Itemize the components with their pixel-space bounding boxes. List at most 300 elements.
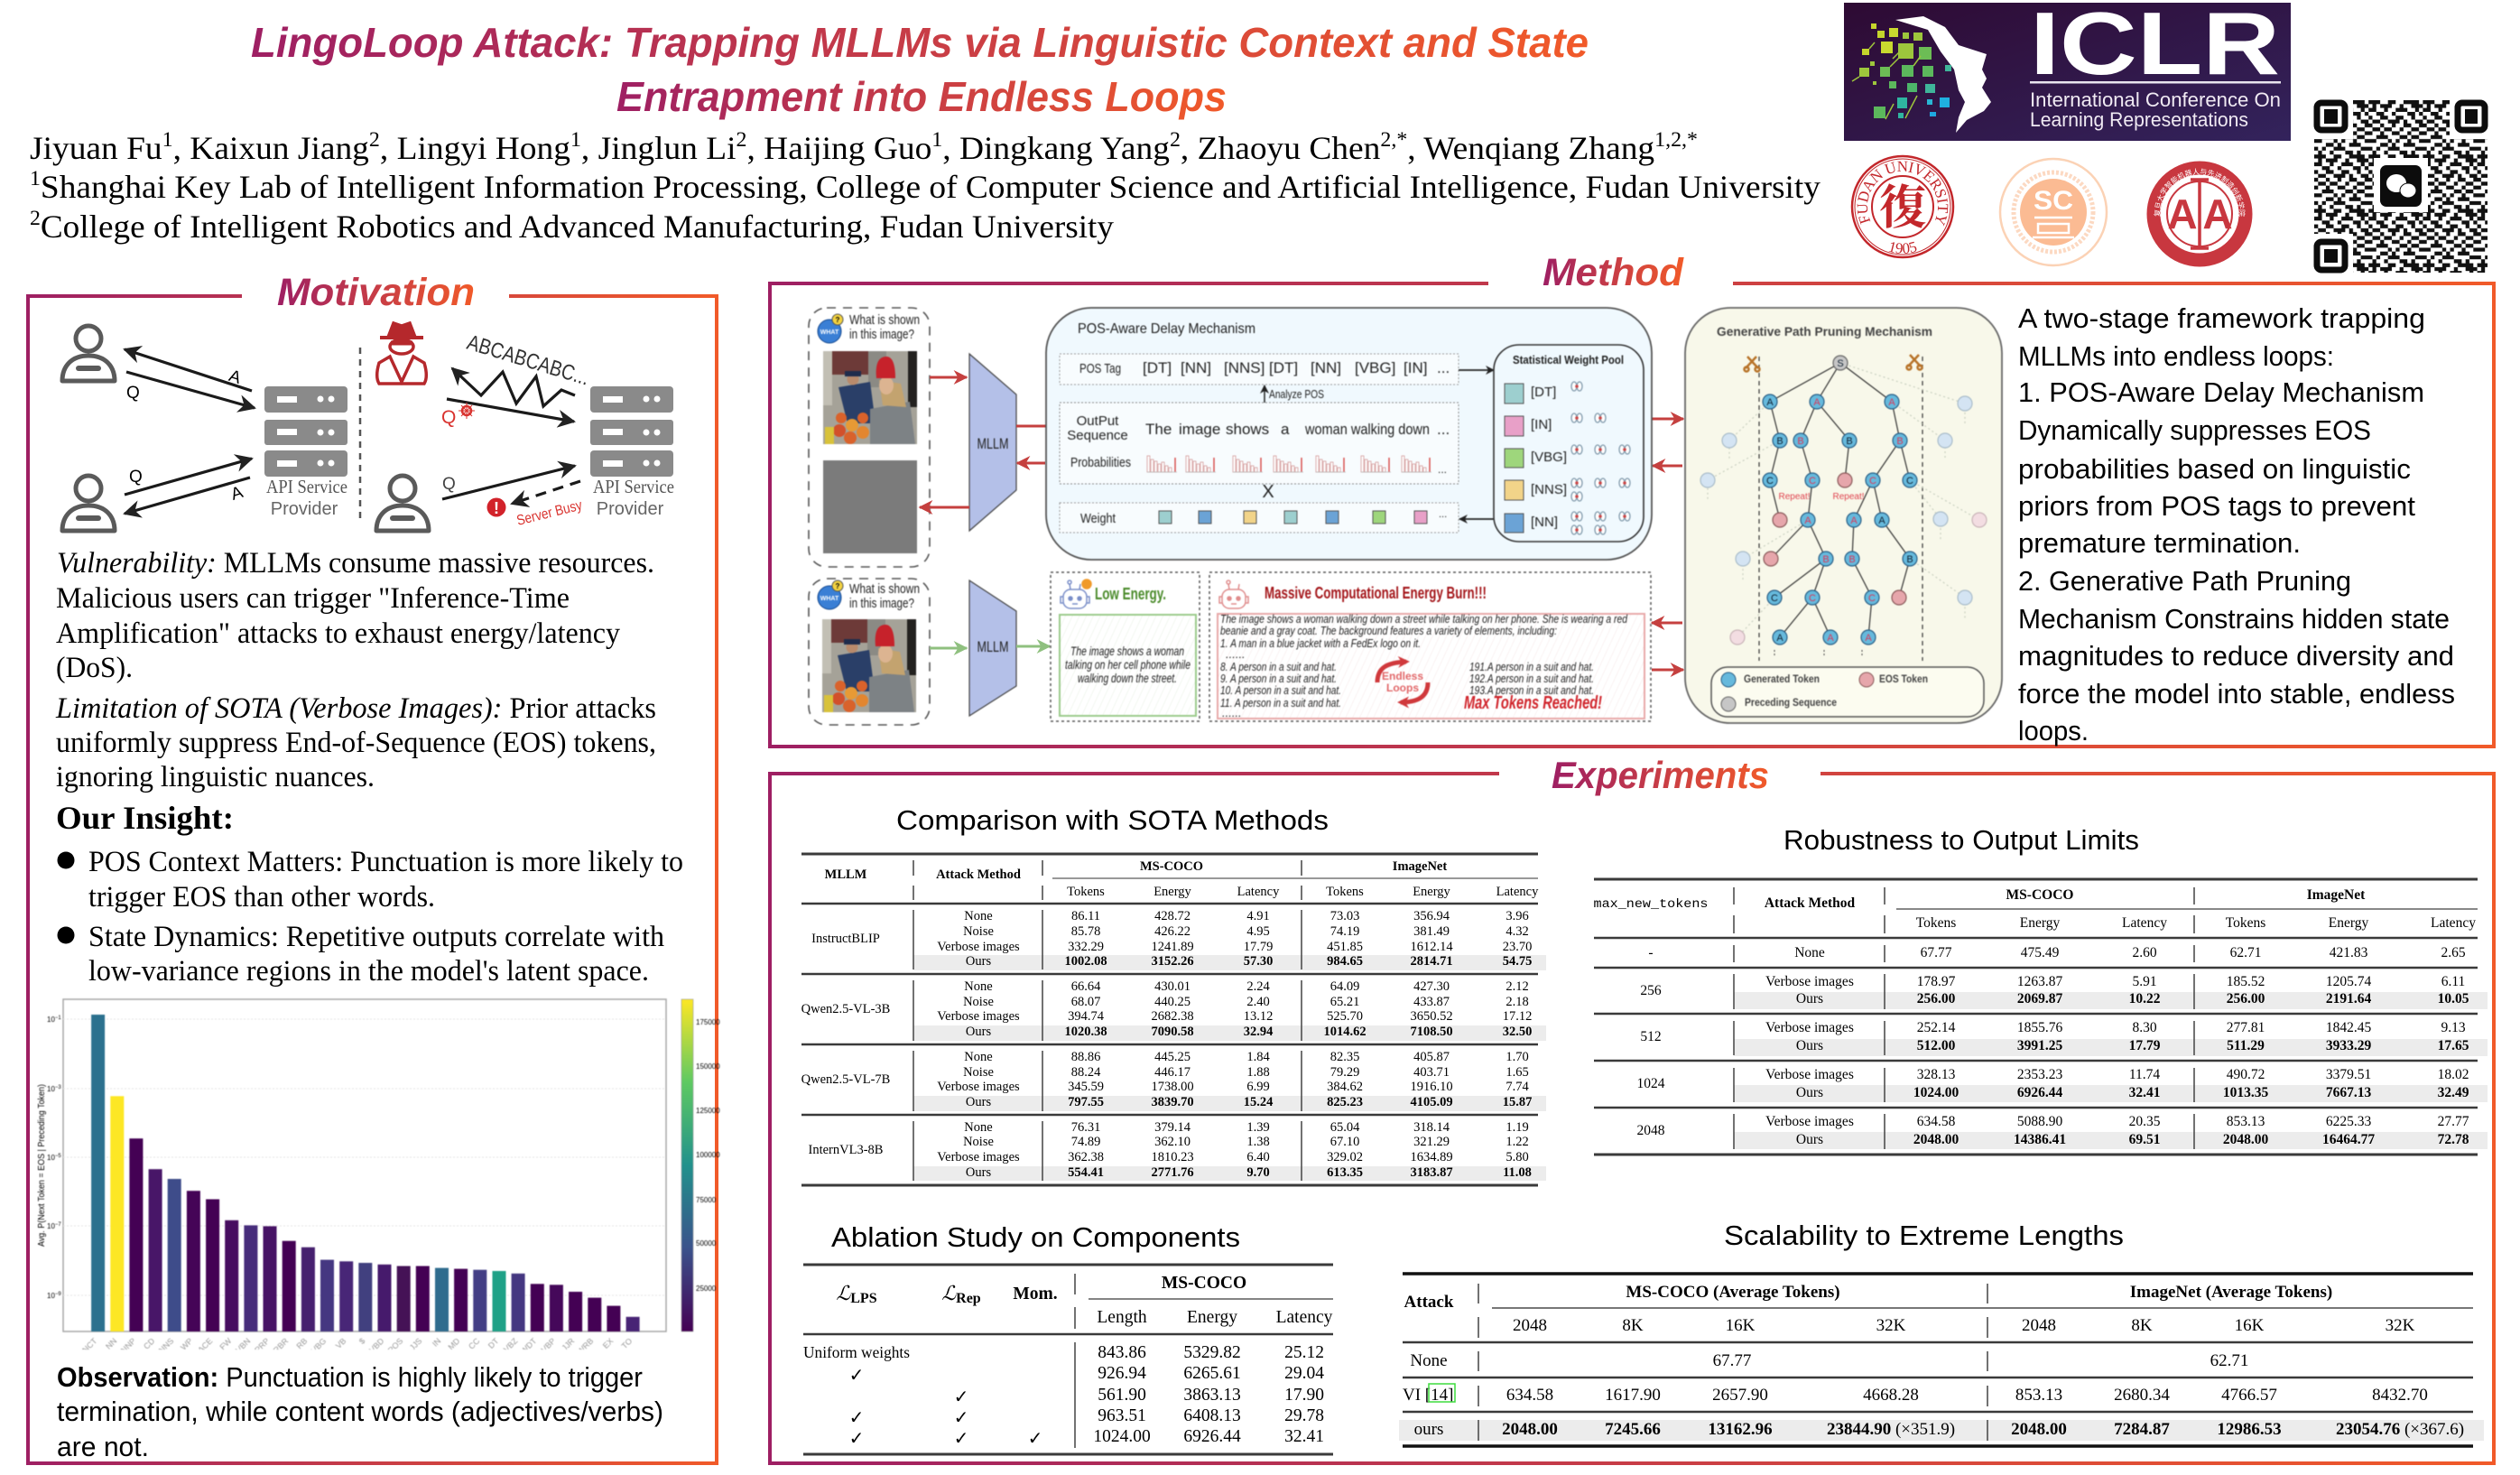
heading: Scalability to Extreme Lengths: Scalability to Extreme Lengths xyxy=(1724,1220,2124,1251)
table: robustness to output limits: Verbose images xyxy=(1765,974,1854,989)
table: ablation study: 926.94 xyxy=(1098,1364,1146,1383)
table: robustness to output limits: 20.35 xyxy=(2129,1114,2161,1129)
table: robustness to output limits: 2069.87 xyxy=(2017,991,2062,1007)
table: comparison with SOTA methods: 426.22 xyxy=(1154,924,1191,939)
colorbar: 50000 xyxy=(696,1239,717,1248)
table: comparison with SOTA methods: 76.31 xyxy=(1071,1120,1100,1135)
labels: repeat: Repeat! xyxy=(1832,492,1865,502)
table: robustness to output limits: 490.72 xyxy=(2227,1067,2265,1082)
table: comparison with SOTA methods: 15.87 xyxy=(1503,1095,1532,1109)
authors: 2 xyxy=(737,128,746,151)
check marks: ✓ xyxy=(849,1406,864,1428)
table: robustness to output limits: 3379.51 xyxy=(2326,1067,2371,1082)
logo: AIA college: A xyxy=(2167,190,2198,237)
table: comparison with SOTA methods: 433.87 xyxy=(1413,995,1450,1009)
node letters: C xyxy=(1868,593,1876,604)
heading: Method: Method xyxy=(1543,251,1684,294)
POS tag row: [IN] xyxy=(1404,359,1427,376)
table: robustness to output limits: Latency xyxy=(2122,915,2167,931)
x axis labels: PRP xyxy=(253,1336,271,1355)
table: comparison with SOTA methods: 4.91 xyxy=(1246,909,1270,923)
table: comparison with SOTA methods: Tokens xyxy=(1326,885,1364,899)
output sequence and probabilities: Sequence xyxy=(1067,428,1128,443)
table: comparison with SOTA methods: 13.12 xyxy=(1244,1009,1273,1024)
node letters: A xyxy=(1878,515,1885,526)
table: comparison with SOTA methods: MS-COCO xyxy=(1140,859,1203,874)
table: robustness to output limits: Ours xyxy=(1796,1132,1823,1147)
weight row: ... xyxy=(1439,509,1447,520)
token nodes xyxy=(1700,356,1987,645)
table: comparison with SOTA methods: 66.64 xyxy=(1071,979,1101,994)
table: robustness to output limits: 16464.77 xyxy=(2322,1132,2375,1147)
table: ablation study: 17.90 xyxy=(1284,1386,1324,1405)
output sequence and probabilities: OutPut xyxy=(1077,413,1119,429)
panel: Method frame xyxy=(770,283,2494,747)
table: scalability to extreme lengths: 8K xyxy=(2131,1316,2153,1335)
labels: API Service Provider: API Service xyxy=(593,476,674,497)
POS tag row xyxy=(1060,354,1459,385)
statistical weight pool: [VBG] xyxy=(1531,450,1567,465)
table: robustness to output limits: 185.52 xyxy=(2227,974,2265,989)
text: method description: Dynamically suppresses EOS xyxy=(2018,414,2371,446)
title xyxy=(251,19,1589,120)
table: comparison with SOTA methods: 68.07 xyxy=(1071,995,1100,1009)
statistical weight pool: [NNS] xyxy=(1531,482,1567,497)
table: ablation study: 32.41 xyxy=(1284,1427,1324,1446)
table: robustness to output limits: Tokens xyxy=(1916,915,1956,931)
table: comparison with SOTA methods: 797.55 xyxy=(1068,1095,1104,1109)
node letters: C xyxy=(1771,593,1778,604)
table: comparison with SOTA methods: 405.87 xyxy=(1413,1050,1450,1064)
table: comparison with SOTA methods: 82.35 xyxy=(1330,1050,1359,1064)
table: ablation study: 843.86 xyxy=(1098,1343,1146,1362)
panel: Generative Path Pruning Mechanism: Generative Path Pruning Mechanism xyxy=(1717,324,1932,339)
text: method description: loops. xyxy=(2018,715,2089,747)
output sequence and probabilities: ... xyxy=(1438,463,1447,476)
table: scalability to extreme lengths: 16K xyxy=(2235,1316,2265,1335)
labels: Q and A xyxy=(126,366,246,505)
node letters: C xyxy=(1766,476,1774,487)
table: scalability to extreme lengths: 2680.34 xyxy=(2114,1386,2170,1405)
table: robustness to output limits: 32.49 xyxy=(2438,1085,2469,1100)
table: robustness to output limits: Ours xyxy=(1796,1038,1823,1053)
table: robustness to output limits: 67.77 xyxy=(1921,945,1952,960)
table: robustness to output limits: 475.49 xyxy=(2021,945,2060,960)
colorbar: 125000 xyxy=(696,1107,720,1115)
table: scalability to extreme lengths: None xyxy=(1410,1351,1448,1370)
table: robustness to output limits: 2048.00 xyxy=(2223,1132,2268,1147)
output sequence and probabilities: The xyxy=(1145,421,1172,438)
table: robustness to output limits: 6225.33 xyxy=(2326,1114,2371,1129)
output sequence and probabilities: image xyxy=(1179,421,1220,438)
arrow: server busy xyxy=(512,481,580,504)
colorbar: 175000 xyxy=(696,1018,720,1026)
x axis labels: VBP xyxy=(540,1336,557,1354)
table: robustness to output limits: 2191.64 xyxy=(2326,991,2371,1007)
table: scalability to extreme lengths: 8K xyxy=(1622,1316,1644,1335)
table: robustness to output limits: 5088.90 xyxy=(2017,1114,2062,1129)
table: robustness to output limits: 2.65 xyxy=(2441,945,2466,960)
weight row xyxy=(1060,503,1459,533)
table: robustness to output limits: 1024 xyxy=(1637,1076,1665,1091)
table: comparison with SOTA methods: 525.70 xyxy=(1327,1009,1363,1024)
text: method description: MLLMs into endless loops: xyxy=(2018,340,2334,372)
check marks: ✓ xyxy=(954,1386,968,1407)
table: comparison with SOTA methods: Latency xyxy=(1237,885,1280,899)
table: comparison with SOTA methods: Attack Method xyxy=(936,867,1021,882)
table: comparison with SOTA methods: 2.40 xyxy=(1246,995,1270,1009)
table: scalability to extreme lengths: 7284.87 xyxy=(2114,1420,2170,1439)
logo: AIA college: 复旦大学智能机器人与先进制造创新学院 xyxy=(2154,168,2246,217)
table: ablation study: Mom. xyxy=(1013,1285,1058,1303)
diagram: clean input (bottom): in this image? xyxy=(849,596,914,611)
table: comparison with SOTA methods: Ours xyxy=(966,1165,991,1180)
label: ABCABCABC: ABCABCABC... xyxy=(464,330,592,391)
y axis: −9 xyxy=(55,1292,61,1297)
logo: Fudan University: FUDAN UNIVERSITY xyxy=(1858,161,1948,226)
table: comparison with SOTA methods: 356.94 xyxy=(1413,909,1450,923)
table: ablation study: LPS xyxy=(850,1291,877,1306)
panel: Low Energy: talking on her cell phone while xyxy=(1065,657,1191,672)
authors: , Wenqiang Zhang xyxy=(1407,130,1654,166)
panel: Low Energy: walking down the street. xyxy=(1078,671,1177,685)
text: method description: A two-stage framework trapping xyxy=(2018,302,2425,334)
table: robustness to output limits: 5.91 xyxy=(2132,974,2157,989)
x axis labels: CD xyxy=(142,1336,157,1351)
text: observation: Observation: Punctuation is highly likely to trigger xyxy=(57,1361,643,1393)
model: MLLM (top) xyxy=(969,354,1016,531)
table: scalability to extreme lengths: 62.71 xyxy=(2210,1351,2248,1370)
model: MLLM (top): MLLM xyxy=(977,435,1009,452)
table: robustness to output limits: 252.14 xyxy=(1917,1020,1956,1035)
logo: Fudan University xyxy=(1850,155,1955,258)
table: comparison with SOTA methods: 2682.38 xyxy=(1151,1009,1194,1024)
x axis labels: DT xyxy=(486,1336,501,1350)
table: robustness to output limits: None xyxy=(1794,945,1825,960)
model: MLLM (bottom): MLLM xyxy=(977,638,1009,655)
logo: AIA college: A xyxy=(2202,190,2233,237)
labels: Q and A: Q xyxy=(126,384,140,403)
table: comparison with SOTA methods: Ours xyxy=(966,954,991,969)
label: malicious Q with virus xyxy=(441,403,475,428)
table: robustness to output limits: ImageNet xyxy=(2307,887,2366,903)
table: comparison with SOTA methods: 825.23 xyxy=(1327,1095,1363,1109)
x axis labels: WDT xyxy=(519,1336,539,1356)
bar chart: EOS probability by POS tag xyxy=(36,999,720,1362)
y axis: 10 xyxy=(47,1154,55,1162)
table: scalability to extreme lengths: 2048.00 xyxy=(2011,1420,2067,1439)
logo: College of Computer Science xyxy=(2000,159,2107,265)
authors: , Kaixun Jiang xyxy=(173,130,369,166)
text: motivation body: ignoring linguistic nuances. xyxy=(56,761,375,793)
table: robustness to output limits: 32.41 xyxy=(2129,1085,2160,1100)
arrow: analyze POS xyxy=(1265,385,1324,404)
token tree edges xyxy=(1770,363,1910,637)
table: robustness to output limits: 178.97 xyxy=(1917,974,1956,989)
list: insights xyxy=(58,846,683,988)
output sequence and probabilities xyxy=(1060,403,1459,484)
authors: , Lingyi Hong xyxy=(380,130,570,166)
table: comparison with SOTA methods: 5.80 xyxy=(1506,1150,1529,1164)
table: robustness to output limits: 256.00 xyxy=(2227,991,2265,1007)
table: ablation study: 25.12 xyxy=(1284,1343,1324,1362)
title: LingoLoop Attack: Trapping MLLMs via Linguistic Context and State xyxy=(251,19,1589,66)
table: comparison with SOTA methods: Latency xyxy=(1496,885,1539,899)
table: robustness to output limits: 634.58 xyxy=(1917,1114,1956,1129)
table: comparison with SOTA methods: None xyxy=(964,909,993,923)
table: scalability to extreme lengths: 1617.90 xyxy=(1605,1386,1661,1405)
table: robustness to output limits: 256 xyxy=(1640,983,1662,998)
icon: endless loops: Loops xyxy=(1386,682,1419,694)
heading: Ablation Study on Components: Ablation Study on Components xyxy=(831,1221,1240,1253)
text: method description: force the model into stable, endless xyxy=(2018,678,2455,710)
logo: Fudan University: 復 xyxy=(1879,170,1926,237)
diagram: normal service vs attack: Q xyxy=(442,475,456,494)
table: comparison with SOTA methods: 54.75 xyxy=(1503,954,1532,969)
table: comparison with SOTA methods: Energy xyxy=(1153,885,1192,899)
icon: users xyxy=(62,326,429,531)
table: ablation study: Rep xyxy=(956,1291,981,1306)
table: robustness to output limits: Tokens xyxy=(2226,915,2265,931)
check marks: ✓ xyxy=(954,1427,968,1449)
table: ablation study: 6926.44 xyxy=(1183,1427,1241,1446)
table: comparison with SOTA methods: Tokens xyxy=(1067,885,1105,899)
table: ablation study: Uniform weights xyxy=(803,1343,910,1361)
labels: repeat xyxy=(1778,492,1865,502)
table: scalability to extreme lengths: 2048.00 xyxy=(1502,1420,1558,1439)
icon: alert: ! xyxy=(494,499,499,517)
table: comparison with SOTA methods: 321.29 xyxy=(1413,1135,1450,1149)
heading: Our Insight: Our Insight: xyxy=(56,800,234,836)
table: comparison with SOTA methods: 394.74 xyxy=(1068,1009,1105,1024)
table: robustness to output limits: 6.11 xyxy=(2441,974,2465,989)
table: comparison with SOTA methods: Ours xyxy=(966,1095,991,1109)
colorbar: 75000 xyxy=(696,1196,717,1204)
output sequence and probabilities: woman walking down xyxy=(1304,421,1430,438)
table: comparison with SOTA methods: 67.10 xyxy=(1330,1135,1359,1149)
x axis labels: VB xyxy=(334,1336,347,1350)
x axis labels: RB xyxy=(294,1336,309,1350)
table: robustness to output limits: 9.13 xyxy=(2441,1020,2466,1035)
table: scalability to extreme lengths: 853.13 xyxy=(2015,1386,2062,1405)
x axis labels: PUNCT xyxy=(72,1336,99,1362)
table: comparison with SOTA methods: Verbose images xyxy=(937,1150,1020,1164)
table: robustness to output limits: 62.71 xyxy=(2230,945,2261,960)
statistical weight pool: [NN] xyxy=(1531,515,1558,530)
table: comparison with SOTA methods: MLLM xyxy=(825,867,867,882)
text: motivation body: (DoS). xyxy=(56,652,133,684)
table: comparison with SOTA methods: 2.24 xyxy=(1246,979,1270,994)
panel: Massive Computational Energy Burn xyxy=(1209,572,1651,721)
legend: Generated Token xyxy=(1744,673,1820,685)
x axis labels: IN xyxy=(431,1336,442,1349)
authors: , Dingkang Yang xyxy=(942,130,1170,166)
table: comparison with SOTA methods: 554.41 xyxy=(1068,1165,1104,1180)
check marks: ✓ xyxy=(849,1364,864,1386)
x axis labels: FW xyxy=(218,1336,234,1351)
table: robustness to output limits: 421.83 xyxy=(2330,945,2368,960)
table: ablation study xyxy=(803,1265,1333,1454)
table: comparison with SOTA methods: 88.24 xyxy=(1071,1065,1101,1080)
table: comparison with SOTA methods: 3650.52 xyxy=(1410,1009,1453,1024)
x axis labels xyxy=(81,1338,632,1350)
logo: ICLR xyxy=(1844,0,2291,141)
table: comparison with SOTA methods: Verbose images xyxy=(937,940,1020,954)
table: comparison with SOTA methods: 57.30 xyxy=(1244,954,1273,969)
icon: endless loops: Endless xyxy=(1382,670,1423,682)
heading: Experiments: Experiments xyxy=(1552,754,1769,796)
x axis labels: VBZ xyxy=(502,1336,520,1354)
text: motivation body: Amplification" attacks to exhaust energy/latency xyxy=(56,617,620,650)
text: method description xyxy=(2018,302,2455,747)
arrows: clean flow green xyxy=(930,646,1050,648)
table: comparison with SOTA methods: 362.38 xyxy=(1068,1150,1104,1164)
arrow: malicious query xyxy=(447,399,574,422)
text: method description: 2. Generative Path Pruning xyxy=(2018,565,2351,597)
node letters: B xyxy=(1846,436,1853,447)
legend: Preceding Sequence xyxy=(1745,696,1837,709)
node letters: A xyxy=(1827,633,1834,644)
table: robustness to output limits: 11.74 xyxy=(2129,1067,2160,1082)
affiliations: 1 xyxy=(30,167,41,190)
POS tag row: [NNS] xyxy=(1224,359,1265,376)
table: comparison with SOTA methods: 345.59 xyxy=(1068,1080,1104,1094)
colorbar: 100000 xyxy=(696,1151,720,1159)
text: observation xyxy=(57,1361,663,1462)
icon: spy attacker xyxy=(377,323,426,384)
table: comparison with SOTA methods: 379.14 xyxy=(1154,1120,1191,1135)
authors: 2,* xyxy=(1380,128,1407,151)
labels: Q and A: Q xyxy=(129,468,143,487)
heading: Motivation: Motivation xyxy=(277,271,475,314)
list: insights: State Dynamics: Repetitive outputs correlate with xyxy=(88,921,664,953)
table: comparison with SOTA methods: 362.10 xyxy=(1154,1135,1191,1149)
table: comparison with SOTA methods: Noise xyxy=(963,1065,994,1080)
table: robustness to output limits: 2048.00 xyxy=(1913,1132,1959,1147)
node letters: A xyxy=(1850,515,1858,526)
table: comparison with SOTA methods: 332.29 xyxy=(1068,940,1104,954)
y axis: −3 xyxy=(55,1085,61,1090)
table: robustness to output limits: Latency xyxy=(2431,915,2476,931)
node letters: B xyxy=(1776,436,1783,447)
table: ablation study: 561.90 xyxy=(1098,1386,1146,1405)
table: robustness to output limits: Ours xyxy=(1796,991,1823,1007)
logo: ICLR: International Conference On xyxy=(2030,88,2281,111)
logo: College of Computer Science: SC xyxy=(2034,186,2073,216)
x axis labels: WP xyxy=(179,1336,194,1352)
table: comparison with SOTA methods: 403.71 xyxy=(1413,1065,1450,1080)
table: robustness to output limits: 72.78 xyxy=(2438,1132,2469,1147)
table: ablation study: 6408.13 xyxy=(1183,1406,1241,1425)
table: comparison with SOTA methods: None xyxy=(964,1050,993,1064)
table: robustness to output limits: 14386.41 xyxy=(2014,1132,2066,1147)
logo: Fudan University: 1905 xyxy=(1888,242,1917,254)
table: scalability to extreme lengths: 23054.76 (×367.6) xyxy=(2336,1420,2464,1439)
table: ablation study: 1024.00 xyxy=(1093,1427,1151,1446)
table: scalability to extreme lengths: 4668.28 xyxy=(1863,1386,1919,1405)
panel: Massive Computational Energy Burn: Massive Computational Energy Burn!!! xyxy=(1265,584,1487,602)
diagram: attack input (top) xyxy=(809,308,930,567)
table: comparison with SOTA methods: 79.29 xyxy=(1330,1065,1359,1080)
text: method description: Mechanism Constrains hidden state xyxy=(2018,603,2450,635)
panel: Massive Computational Energy Burn: 10. A person in a suit and hat. xyxy=(1220,683,1341,697)
table: comparison with SOTA methods: 3183.87 xyxy=(1410,1165,1453,1180)
table: robustness to output limits: 6926.44 xyxy=(2017,1085,2062,1100)
text: motivation body: uniformly suppress End-of-Sequence (EOS) tokens, xyxy=(56,727,656,759)
table: comparison with SOTA methods: Noise xyxy=(963,924,994,939)
node letters: B xyxy=(1848,554,1856,565)
table: comparison with SOTA methods: 7108.50 xyxy=(1410,1025,1453,1039)
panel: Massive Computational Energy Burn: 11. A person in a suit and hat. xyxy=(1220,696,1341,710)
table: comparison with SOTA methods: Ours xyxy=(966,1025,991,1039)
x axis labels: VBG xyxy=(310,1336,328,1355)
table: comparison with SOTA methods: 1.39 xyxy=(1246,1120,1270,1135)
POS tag row: [NN] xyxy=(1311,359,1341,376)
y axis: −1 xyxy=(55,1016,61,1021)
panel: Massive Computational Energy Burn: 193.A person in a suit and hat. xyxy=(1469,683,1594,697)
table: comparison with SOTA methods: 451.85 xyxy=(1327,940,1363,954)
table: comparison with SOTA methods: 3.96 xyxy=(1506,909,1529,923)
panel: Massive Computational Energy Burn: beanie and a gray coat. The background features a variety of elements, including: xyxy=(1220,624,1557,637)
y axis: 10 xyxy=(47,1222,55,1230)
POS tag row: ... xyxy=(1437,359,1450,376)
node letters xyxy=(1766,358,1913,644)
panel: Motivation frame xyxy=(28,296,717,1463)
table: comparison with SOTA methods: 11.08 xyxy=(1503,1165,1532,1180)
table: comparison with SOTA methods: 4105.09 xyxy=(1410,1095,1453,1109)
table: robustness to output limits: 853.13 xyxy=(2227,1114,2265,1129)
panel: Massive Computational Energy Burn: 191.A person in a suit and hat. xyxy=(1469,660,1594,673)
table: comparison with SOTA methods: 6.99 xyxy=(1246,1080,1270,1094)
table: comparison with SOTA methods: 73.03 xyxy=(1330,909,1359,923)
arrows: normal requests xyxy=(125,349,255,514)
logo: ICLR: Learning Representations xyxy=(2030,108,2248,131)
table: comparison with SOTA methods: 86.11 xyxy=(1071,909,1100,923)
table: robustness to output limits: Energy xyxy=(2020,915,2060,931)
table: scalability to extreme lengths: 16K xyxy=(1726,1316,1756,1335)
panel: Low Energy: Low Energy. xyxy=(1095,585,1166,603)
node letters: A xyxy=(1776,633,1783,644)
node letters: B xyxy=(1906,554,1913,565)
x axis labels: $ xyxy=(357,1336,366,1346)
table: scalability to extreme lengths: 2657.90 xyxy=(1712,1386,1768,1405)
table: comparison with SOTA methods: 1.65 xyxy=(1506,1065,1529,1080)
icon: alert xyxy=(487,498,505,517)
x axis labels: CC xyxy=(467,1336,482,1351)
table: comparison with SOTA methods: 446.17 xyxy=(1154,1065,1191,1080)
table: comparison with SOTA methods: 1241.89 xyxy=(1151,940,1194,954)
table: scalability to extreme lengths: ours xyxy=(1414,1420,1443,1439)
heading: Comparison with SOTA Methods: Comparison with SOTA Methods xyxy=(896,804,1329,836)
icon: endless loops xyxy=(1377,662,1428,702)
table: comparison with SOTA methods: InstructBLIP xyxy=(811,932,880,946)
table: comparison with SOTA methods: ImageNet xyxy=(1393,859,1447,874)
table: comparison with SOTA methods: 1.70 xyxy=(1506,1050,1529,1064)
labels: API Service Provider: Provider xyxy=(271,499,338,519)
check marks: ✓ xyxy=(849,1427,864,1449)
panel: Massive Computational Energy Burn: The image shows a woman walking down a street while talking on her phone. She is wearing a red xyxy=(1220,612,1628,626)
text: method description: premature termination. xyxy=(2018,527,2301,559)
table: comparison with SOTA methods: 4.32 xyxy=(1506,924,1529,939)
table: comparison with SOTA methods: Verbose images xyxy=(937,1009,1020,1024)
table: robustness to output limits: 17.65 xyxy=(2438,1038,2469,1053)
table: robustness to output limits: 512 xyxy=(1640,1029,1662,1044)
table: comparison with SOTA methods: 1020.38 xyxy=(1064,1025,1107,1039)
table: robustness to output limits: 10.05 xyxy=(2438,991,2469,1007)
y axis xyxy=(36,1016,61,1300)
table: comparison with SOTA methods: 32.94 xyxy=(1244,1025,1273,1039)
table: robustness to output limits: 1842.45 xyxy=(2326,1020,2371,1035)
